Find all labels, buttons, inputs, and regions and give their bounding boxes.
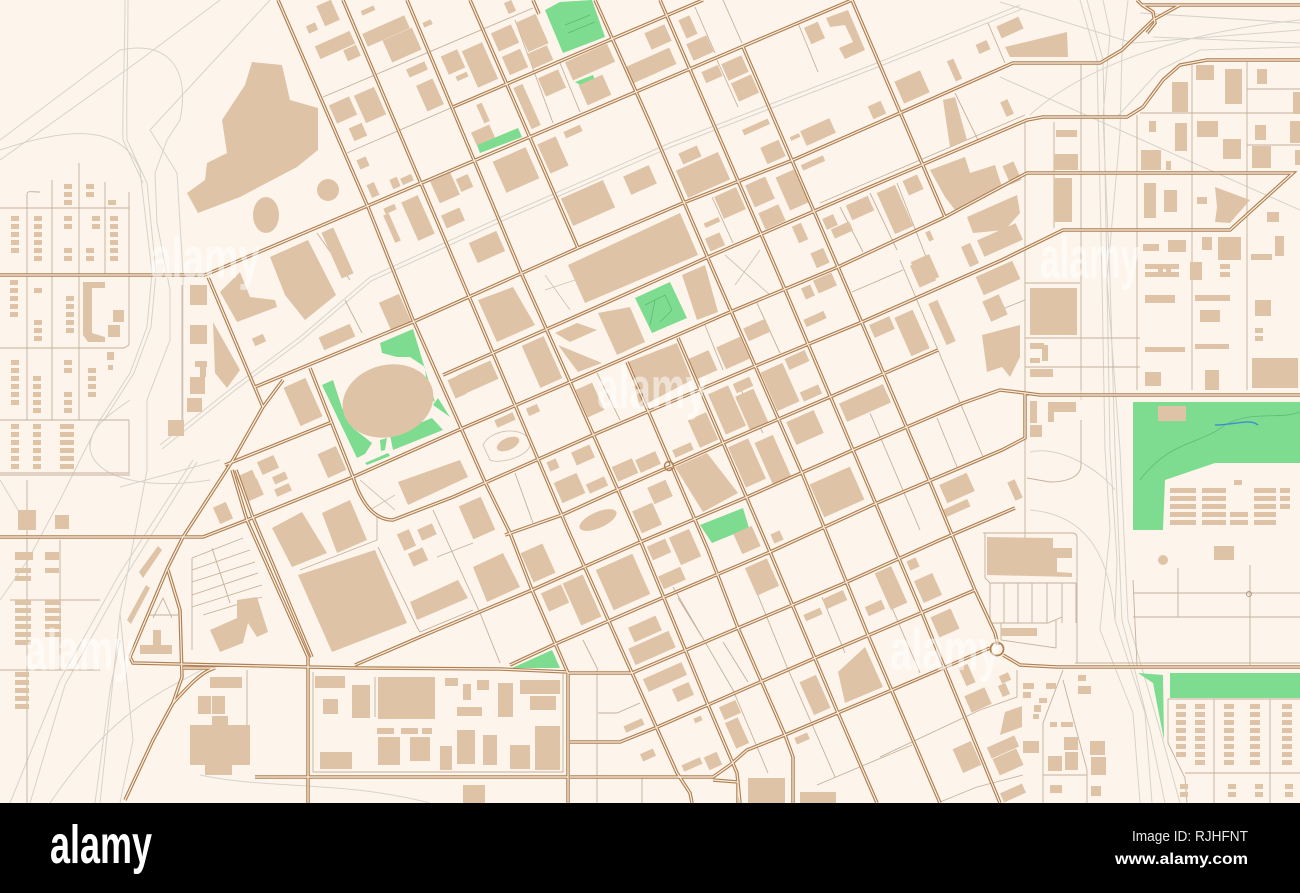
building: arena hall two bbox=[322, 500, 367, 553]
buildings: rotated blocks bbox=[213, 0, 1026, 802]
building: long block north bbox=[398, 460, 468, 505]
park: south square bbox=[700, 508, 749, 543]
park details bbox=[565, 15, 1300, 480]
building: east rectangle bbox=[1252, 358, 1298, 388]
building: flower-shaped annex bbox=[317, 179, 339, 201]
building: central cluster bbox=[628, 343, 692, 407]
building: strip two bbox=[127, 585, 150, 624]
park: central square bbox=[635, 282, 687, 333]
building: hall south-east bbox=[987, 537, 1072, 577]
building: east warehouse bbox=[1030, 288, 1077, 335]
building: tall east block bbox=[943, 97, 967, 147]
building: east cluster bbox=[930, 157, 1002, 210]
building: long block bbox=[410, 580, 468, 620]
building: northern C block bbox=[826, 10, 865, 59]
watermarks: alamy bbox=[1040, 226, 1140, 291]
building: central block north bbox=[478, 287, 535, 342]
building: west wing bbox=[220, 272, 277, 322]
building: L block bbox=[473, 553, 520, 602]
park: north square bbox=[545, 0, 605, 53]
park: south-east strip bbox=[1170, 673, 1300, 698]
building: stadium bbox=[334, 354, 442, 448]
watermarks: alamy bbox=[25, 618, 135, 683]
building: round annex bbox=[253, 197, 279, 233]
building: hall bottom bbox=[378, 677, 435, 719]
roundabouts bbox=[664, 462, 1252, 656]
building: diagonal wedge two bbox=[558, 345, 602, 372]
park: small plaza bbox=[575, 75, 594, 85]
building: east cluster 2 bbox=[967, 195, 1020, 233]
building: north-east warehouse bbox=[1005, 32, 1068, 57]
building: central tall block bbox=[598, 307, 645, 355]
website: www.alamy.com bbox=[1114, 851, 1248, 868]
building: south-east block bbox=[838, 647, 883, 703]
building: arena annex bbox=[298, 550, 407, 652]
building: diagonal wedge one bbox=[555, 323, 597, 342]
park: south-east wedge bbox=[1138, 673, 1164, 740]
buildings: large irregular footprints bbox=[127, 10, 1298, 775]
building: convention centre bbox=[568, 213, 698, 303]
park: large east park bbox=[1133, 402, 1300, 530]
building: arena hall bbox=[272, 512, 327, 567]
parks bbox=[322, 0, 1300, 740]
building: court oval bbox=[495, 434, 521, 454]
watermarks: alamy bbox=[150, 226, 260, 291]
watermarks: alamy bbox=[890, 618, 1000, 683]
building: south-east corner block bbox=[1000, 706, 1022, 735]
building: east of park bbox=[682, 265, 718, 320]
park: bottom triangle bbox=[512, 650, 560, 668]
building: L shaped south-west bbox=[210, 597, 268, 652]
watermarks: alamy bbox=[597, 356, 707, 421]
building: large east block bbox=[982, 325, 1020, 377]
building: southern centre block bbox=[675, 453, 738, 512]
houses: small lots bbox=[10, 184, 1293, 800]
footer bar bbox=[0, 803, 1300, 893]
building: campus hall bbox=[270, 240, 336, 320]
building: cross-shaped block bbox=[190, 716, 250, 775]
building: strip one bbox=[139, 546, 162, 578]
park: strip bbox=[477, 128, 522, 153]
building: hospital complex bbox=[187, 62, 318, 213]
park: stadium grounds bbox=[322, 329, 450, 465]
logo: alamy: alamy bbox=[50, 815, 152, 875]
image id: Image ID: RJHFNT bbox=[1132, 828, 1248, 845]
watermarks bbox=[25, 226, 1140, 683]
